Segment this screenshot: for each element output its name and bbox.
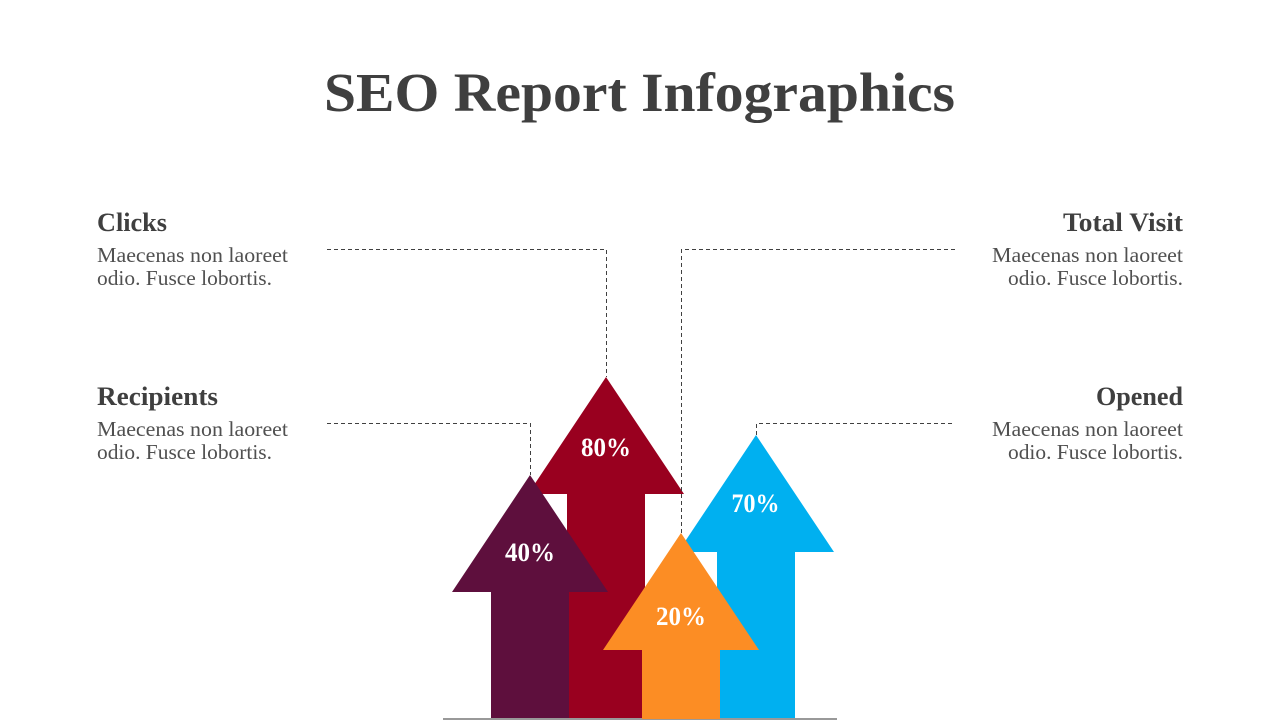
text block: Recipients: Maecenas non laoreet [97,417,288,441]
text block: Total Visit: odio. Fusce lobortis. [1008,266,1183,290]
text block: Opened [992,382,1184,464]
arrow: 80%: 80% [581,433,631,462]
text block: Clicks: odio. Fusce lobortis. [97,266,272,290]
text block: Clicks: Maecenas non laoreet [97,243,288,267]
arrow: 70%: 70% [732,489,780,518]
text block: Total Visit: Total Visit [1063,208,1183,237]
arrow: 40% [452,475,608,718]
connector: Total Visit [682,250,955,533]
arrow: 20%: 20% [656,602,706,631]
text block: Clicks: Clicks [97,208,167,237]
arrow: 20% [603,533,759,719]
text block: Clicks [97,208,288,290]
text block: Recipients [97,382,288,464]
text block: Total Visit: Maecenas non laoreet [992,243,1183,267]
baseline [443,718,837,720]
connector: Opened [756,424,952,435]
text block: Opened: odio. Fusce lobortis. [1008,440,1183,464]
arrow: 40%: 40% [505,538,555,567]
text block: Opened: Opened [1096,382,1184,411]
title: SEO Report Infographics [324,62,955,123]
connector: Recipients [327,424,530,475]
connector: Clicks [327,250,606,377]
text block: Recipients: Recipients [97,382,218,411]
text block: Opened: Maecenas non laoreet [992,417,1183,441]
arrow: 70% [678,435,834,718]
text block: Total Visit [992,208,1183,290]
text block: Recipients: odio. Fusce lobortis. [97,440,272,464]
arrow: 80% [528,377,684,718]
